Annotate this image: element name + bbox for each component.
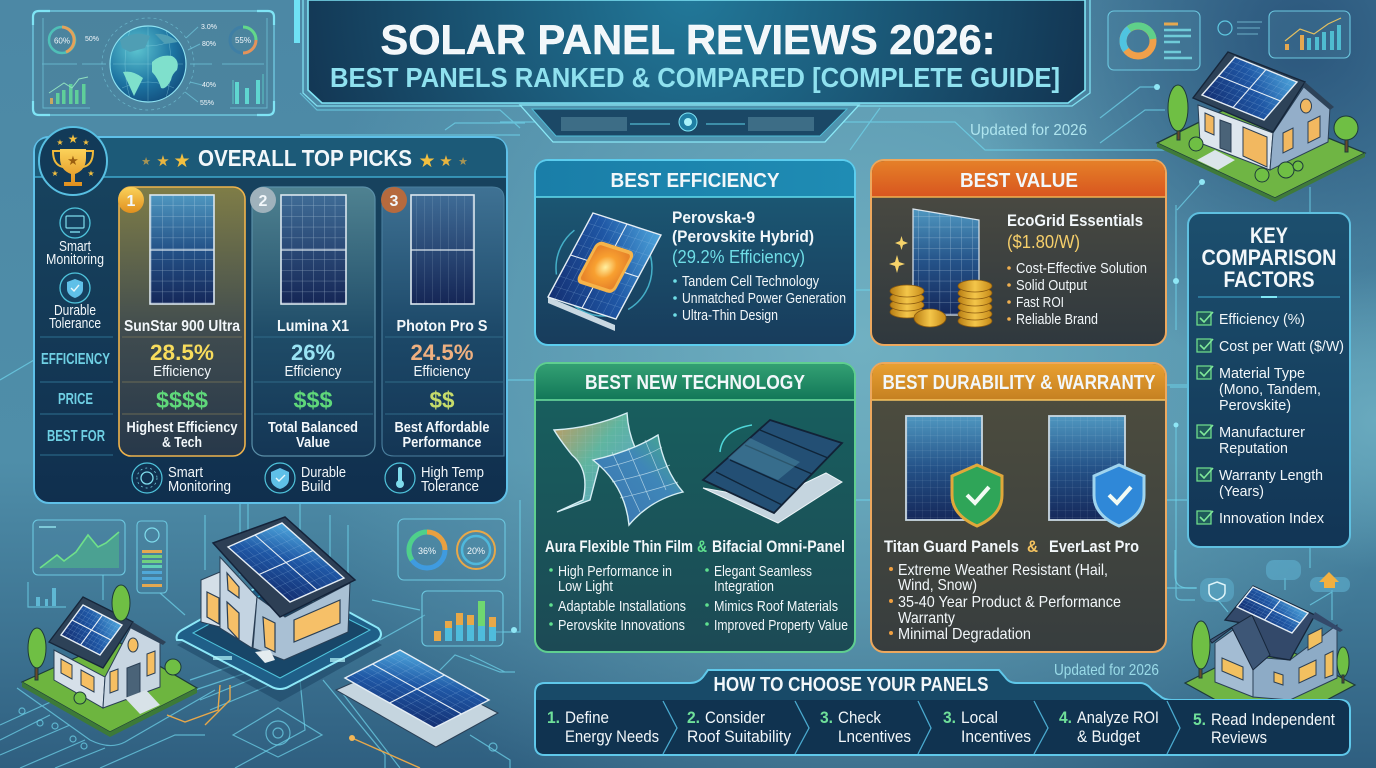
step 4 [1059,708,1159,746]
globe percentages: 40% [202,82,216,89]
panel: how to choose your panels [535,670,1350,755]
card: best durability and warranty: EverLast Pro [1049,537,1139,556]
bullet list: Ultra-Thin Design [682,307,778,324]
bullet list: Warranty [898,610,955,627]
header banner [294,0,1090,106]
column: Photon Pro S: Efficiency [414,363,471,380]
icon: flexible thin film [554,413,683,525]
product text: EcoGrid Essentials [1007,211,1143,230]
checklist: Manufacturer [1219,424,1305,441]
small ring chart right: 55% [235,36,251,45]
bottom feature: smart monitoring [132,463,231,495]
bullet list: Cost-Effective Solution [1016,260,1147,277]
vertical status card [137,521,167,593]
updated label top: Updated for 2026 [970,122,1087,139]
bullet list: Wind, Snow) [898,577,977,594]
column: Photon Pro S: Performance [402,434,482,451]
trophy badge: ★ [56,138,64,147]
checklist: Perovskite) [1219,397,1291,414]
bottom feature: smart monitoring: Monitoring [168,478,231,495]
step 5: Reviews [1211,728,1267,747]
bullet list left: Adaptable Installations [558,598,686,615]
icon: everlast panel with shield [1049,416,1144,526]
heading: BEST EFFICIENCY [610,170,780,192]
bullet list: Minimal Degradation [898,626,1031,643]
step 3 local: Local [961,708,998,727]
bullet list: Tandem Cell Technology [682,273,819,290]
trophy badge: ★ [82,138,90,147]
bullet list right: Improved Property Value [714,617,848,634]
trophy badge [39,127,107,195]
left feature icons [46,208,104,332]
bottom feature: high temp tolerance: Tolerance [421,478,479,495]
globe percentages: 55% [200,100,214,107]
column: SunStar 900 Ultra: 1 [127,193,136,210]
globe [102,18,194,110]
checklist: Efficiency (%) [1219,311,1305,328]
bullet list: Unmatched Power Generation [682,290,846,307]
row labels [41,351,110,445]
card: best new technology: & [697,537,707,556]
checklist: Material Type [1219,365,1305,382]
house: top right [1157,52,1365,202]
bullet list right: Mimics Roof Materials [714,598,838,615]
dashboard: globe and charts [33,11,274,115]
step 3 check: Lncentives [838,727,911,746]
donut charts card: 20% [467,546,485,556]
step 4: Analyze ROI [1077,708,1159,727]
column: SunStar 900 Ultra: Highest Efficiency [126,419,238,436]
globe percentages: 80% [202,41,216,48]
bullet list [673,273,846,324]
column: SunStar 900 Ultra: & Tech [162,434,202,451]
column: Lumina X1: 26% [291,340,335,365]
icon: titan guard panel with shield [906,416,1002,526]
top right dashboard: growth chart [1218,11,1350,58]
trophy badge: ★ [87,169,95,178]
step 5: 5. [1193,710,1206,729]
column: Photon Pro S: 3 [390,193,399,210]
card: best value: ($1.80/W) [1007,232,1080,252]
globe percentages: 3.0% [201,24,217,31]
heading: BEST VALUE [960,170,1078,192]
card: best efficiency [535,160,855,345]
column: Lumina X1: Efficiency [284,363,342,380]
card: best efficiency: (Perovskite Hybrid) [672,227,814,246]
left feature icons: Durable [54,302,96,319]
trophy badge: ★ [51,169,59,178]
step 1 [547,708,659,746]
rating stars: ★ [458,156,468,168]
heading: overall top picks: OVERALL TOP PICKS [198,145,412,171]
heading: BEST DURABILITY & WARRANTY [882,372,1156,394]
column: Lumina X1: Value [296,434,330,451]
small ring chart right [230,27,256,53]
house: bottom left [22,585,197,737]
card: best new technology [535,363,855,652]
bullet list right: Integration [714,578,774,595]
product text: Perovska-9 [672,208,755,227]
column: Lumina X1: $$$ [294,387,333,413]
column: Lumina X1: 2 [259,193,268,210]
bullet list: 35-40 Year Product & Performance [898,594,1121,611]
heading: COMPARISON [1202,245,1336,270]
left feature icons: Monitoring [46,251,104,268]
bullet list: Extreme Weather Resistant (Hail, [898,562,1108,579]
checklist: Cost per Watt ($/W) [1219,338,1344,355]
small ring chart left: 60% [54,36,70,46]
step 3 local: Incentives [961,727,1031,746]
heading: FACTORS [1224,267,1314,292]
column: SunStar 900 Ultra: 28.5% [150,340,214,365]
bullet list right: Elegant Seamless [714,563,812,580]
mini bars right [232,74,264,104]
step 2: Roof Suitability [687,727,791,746]
step 3 local: 3. [943,708,956,727]
rating stars: ★ [439,153,453,170]
donut charts card: 36% [418,546,436,556]
icon: bifacial panel [703,420,842,523]
rating stars [141,151,468,172]
step 5: Read Independent [1211,710,1335,729]
card: best value [871,160,1166,345]
column: Photon Pro S: 24.5% [410,340,474,365]
card: best durability and warranty: & [1027,537,1038,556]
step 3 check: Check [838,708,881,727]
bottom feature: durable build [265,463,346,495]
title: SOLAR PANEL REVIEWS 2026: [380,16,996,63]
column: Photon Pro S: Best Affordable [394,419,490,436]
checklist: (Mono, Tandem, [1219,381,1321,398]
rating stars: ★ [141,156,151,168]
column: SunStar 900 Ultra: SunStar 900 Ultra [124,318,240,335]
product names: Aura Flexible Thin Film [545,537,693,556]
step 2: Consider [705,708,765,727]
column: Photon Pro S [381,187,504,456]
column: Lumina X1: Total Balanced [268,419,358,436]
card: best efficiency: (29.2% Efficiency) [672,247,805,267]
row labels: PRICE [58,391,93,408]
step 3 check [820,708,911,746]
panel: overall top picks [34,127,507,503]
row labels: BEST FOR [47,428,105,445]
checklist: Innovation Index [1219,510,1324,527]
rating stars: ★ [173,151,191,172]
house: bottom right [1175,550,1355,730]
solar panel: flat on base [336,650,498,747]
bullet list [1007,260,1147,328]
column: Lumina X1 [250,187,375,456]
mini bars left [49,77,88,104]
product names: Titan Guard Panels [884,537,1019,556]
bottom feature: high temp tolerance [385,463,484,495]
small ring chart left: 50% [85,36,99,43]
card: best durability and warranty [871,363,1166,652]
step 2: 2. [687,708,700,727]
left feature icons: Smart [59,238,92,255]
step 1: Energy Needs [565,727,659,746]
step 3 check: 3. [820,708,833,727]
donut charts card [398,519,505,580]
panel: key comparison factors [1188,213,1350,547]
column: Photon Pro S: $$ [430,387,455,413]
heading: BEST NEW TECHNOLOGY [585,372,806,394]
step 1: Define [565,708,609,727]
step 2 [687,708,791,746]
trees and shrubs [1168,85,1358,182]
line chart card [33,520,125,575]
bullet list: Fast ROI [1016,294,1064,311]
column: SunStar 900 Ultra [118,187,245,456]
step 4: 4. [1059,708,1072,727]
updated label bottom: Updated for 2026 [1054,662,1159,679]
column: SunStar 900 Ultra: $$$$ [156,387,208,413]
bullet list left: Perovskite Innovations [558,617,685,634]
trees [1192,621,1349,683]
step 1: 1. [547,708,560,727]
heading [1202,223,1336,292]
bottom feature: high temp tolerance: High Temp [421,464,484,481]
bullet list: Reliable Brand [1016,311,1098,328]
icon: perovskite panel [548,213,661,331]
rating stars: ★ [418,151,436,172]
bullet list left [549,563,686,634]
trophy badge: ★ [67,153,79,168]
heading: KEY [1250,223,1288,248]
step 5 [1193,710,1335,747]
step 4: & Budget [1077,727,1140,746]
bullet list left: Low Light [558,578,614,595]
checklist [1197,311,1344,527]
row labels: EFFICIENCY [41,351,110,368]
checklist: (Years) [1219,483,1264,500]
bullet list right [705,563,848,634]
icon clouds [1175,550,1350,620]
globe percentages [200,24,217,107]
bullet list [889,562,1121,643]
bullet list: Solid Output [1016,277,1088,294]
house: centre on platform [177,517,382,702]
checklist: Warranty Length [1219,467,1323,484]
card: best new technology: Bifacial Omni-Panel [712,537,845,556]
trophy badge: ★ [68,132,78,146]
bullet list left: High Performance in [558,563,672,580]
small ring chart left [49,27,99,53]
column: Lumina X1: Lumina X1 [277,318,349,335]
column: Photon Pro S: Photon Pro S [396,318,488,335]
heading: HOW TO CHOOSE YOUR PANELS [714,674,988,696]
column: SunStar 900 Ultra: Efficiency [153,363,211,380]
subtitle: BEST PANELS RANKED & COMPARED [COMPLETE GUIDE] [330,62,1060,93]
bottom feature: durable build: Durable [301,464,346,481]
header decorative console [520,105,859,142]
bottom feature: smart monitoring: Smart [168,464,204,481]
trees [28,585,181,704]
bottom feature: durable build: Build [301,478,331,495]
rating stars: ★ [156,153,170,170]
bar chart card [422,591,503,646]
icon: panel and coins [889,209,992,327]
left feature icons: Tolerance [49,315,101,332]
small bar chart [28,575,103,607]
top right dashboard: donut [1108,11,1200,70]
checklist: Reputation [1219,440,1288,457]
step 3 local [943,708,1031,746]
